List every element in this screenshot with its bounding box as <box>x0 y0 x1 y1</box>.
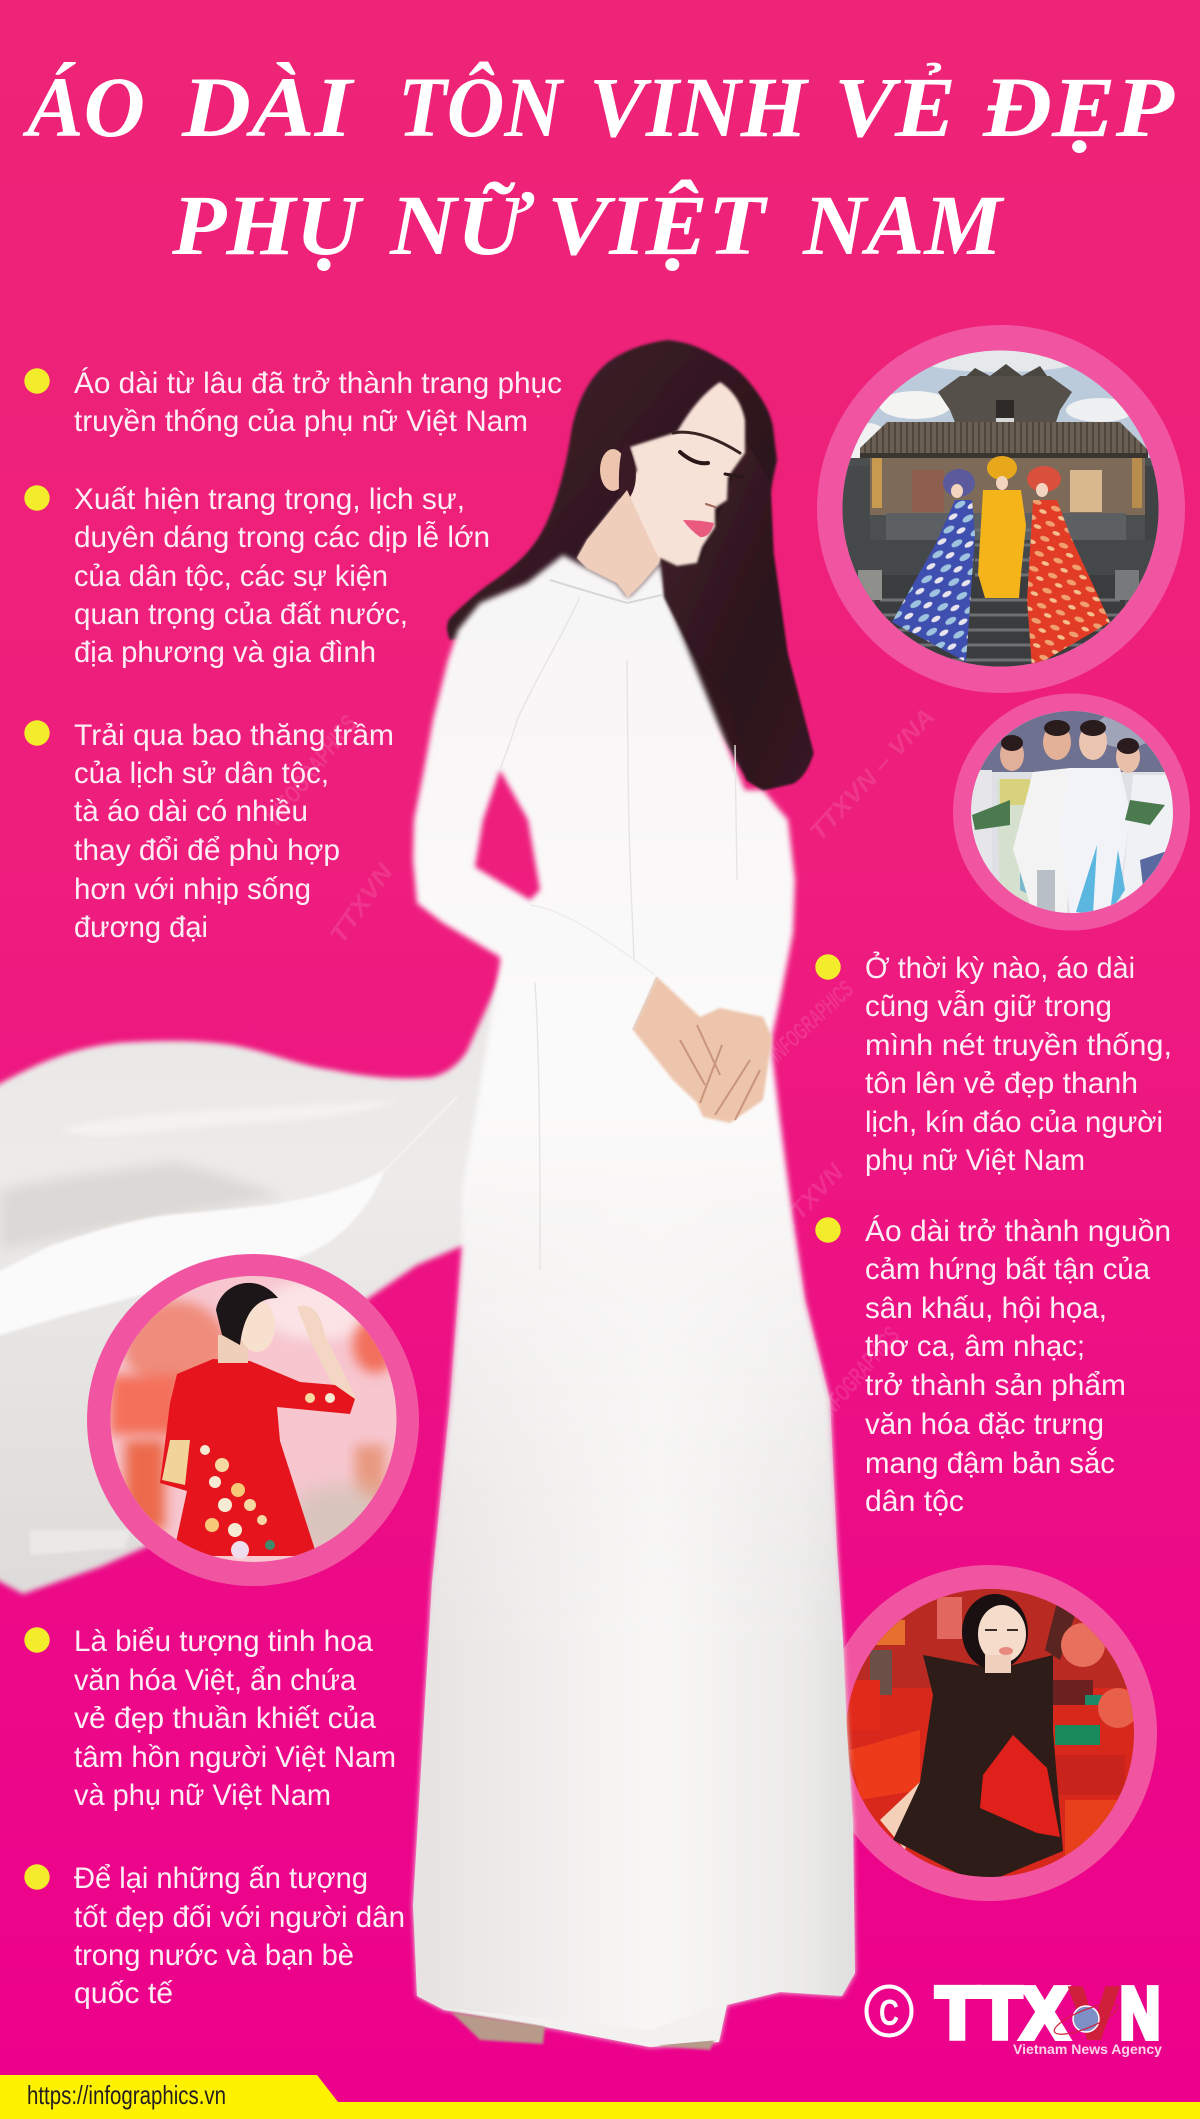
text block: intro: truyền thống của phụ nữ Việt Nam <box>74 405 528 438</box>
footer: yellow url tab: https://infographics.vn <box>27 2080 226 2110</box>
text block: tradition: Ở thời kỳ nào, áo dài <box>865 951 1135 985</box>
neck shadow <box>577 490 660 597</box>
text block: symbol: vẻ đẹp thuần khiết của <box>74 1702 376 1735</box>
text block: tradition: mình nét truyền thống, <box>865 1029 1172 1062</box>
text block: symbol: và phụ nữ Việt Nam <box>74 1779 331 1812</box>
hair back <box>447 340 813 790</box>
text block: history: của lịch sử dân tộc, <box>74 757 329 790</box>
text block: symbol: tâm hồn người Việt Nam <box>74 1741 396 1774</box>
title: TÔN <box>398 59 565 155</box>
text block: intro <box>74 367 562 438</box>
text block: inspiration: văn hóa đặc trưng <box>865 1408 1104 1441</box>
text block: tradition: phụ nữ Việt Nam <box>865 1144 1085 1177</box>
footer: yellow url tab <box>0 2075 1200 2119</box>
train of the dress <box>0 963 545 1594</box>
text block: history: thay đổi để phù hợp <box>74 834 340 867</box>
text block: intro: Áo dài từ lâu đã trở thành trang phục <box>74 367 562 400</box>
title: ÁO <box>22 59 145 155</box>
title: VẺ <box>834 59 956 155</box>
text block: occasions: của dân tộc, các sự kiện <box>74 560 388 593</box>
text block: tradition: tôn lên vẻ đẹp thanh <box>865 1067 1138 1100</box>
train folds <box>0 1097 457 1555</box>
logo: TTXVN: Vietnam News Agency <box>1013 2042 1163 2057</box>
text block: inspiration: Áo dài trở thành nguồn <box>865 1215 1171 1248</box>
text block: inspiration: mang đậm bản sắc <box>865 1447 1115 1480</box>
photo circle: three women at the palace <box>817 325 1185 693</box>
text block: impressions: tốt đẹp đối với người dân <box>74 1901 405 1934</box>
text block: occasions: địa phương và gia đình <box>74 636 376 669</box>
text block: occasions: duyên dáng trong các dịp lễ lớn <box>74 521 490 554</box>
skirt shading <box>413 1200 855 2047</box>
text block: history: đương đại <box>74 911 208 944</box>
text block: symbol: văn hóa Việt, ẩn chứa <box>74 1664 356 1697</box>
text block: impressions: trong nước và bạn bè <box>74 1939 354 1972</box>
text block: inspiration: trở thành sản phẩm <box>865 1369 1126 1402</box>
dress seams <box>500 580 737 1270</box>
ear <box>600 449 626 491</box>
title: NAM <box>802 177 1005 273</box>
hands <box>633 977 772 1123</box>
eyes, brows and lips <box>673 432 743 537</box>
text block: history: tà áo dài có nhiều <box>74 795 308 828</box>
watermarks: TTXVN – VNA <box>805 703 940 846</box>
hair front <box>662 440 813 790</box>
title: DÀI <box>181 59 355 155</box>
text block: impressions: Để lại những ấn tượng <box>74 1862 368 1895</box>
text block: history: Trải qua bao thăng trầm <box>74 719 394 752</box>
text block: occasions: Xuất hiện trang trọng, lịch sự, <box>74 483 465 516</box>
text block: history: hơn với nhịp sống <box>74 873 311 906</box>
bullets <box>24 368 841 1890</box>
watermarks: TTXVN <box>325 859 399 948</box>
watermarks: INFOGRAPHICS <box>261 711 363 830</box>
text block: symbol: Là biểu tượng tinh hoa <box>74 1625 373 1658</box>
text block: tradition: lịch, kín đáo của người <box>865 1106 1163 1139</box>
photo circle: painting of woman in black <box>821 1565 1157 1901</box>
photo: woman in white ao dai <box>0 340 870 2060</box>
text block: symbol <box>74 1625 396 1812</box>
title: VINH <box>589 59 810 155</box>
text block: inspiration <box>865 1215 1171 1518</box>
title: VIỆT <box>547 177 769 273</box>
text block: inspiration: dân tộc <box>865 1485 964 1518</box>
text block: tradition <box>865 951 1172 1177</box>
text block: occasions: quan trọng của đất nước, <box>74 598 408 631</box>
watermarks: INFOGRAPHICS <box>814 1322 905 1424</box>
text block: occasions <box>74 483 490 669</box>
shoes <box>444 2003 727 2050</box>
watermarks <box>261 703 940 1424</box>
text block: impressions <box>74 1862 405 2010</box>
title: PHỤ <box>171 177 364 273</box>
text block: inspiration: thơ ca, âm nhạc; <box>865 1330 1085 1363</box>
hair strand by the cheek <box>619 440 636 510</box>
dress silhouette <box>413 555 855 2047</box>
logo: TTXVN: TTX <box>936 1974 1068 2054</box>
text block: history <box>74 719 394 944</box>
logo: TTXVN: N <box>1120 1974 1160 2054</box>
title: ĐẸP <box>982 59 1176 155</box>
title: NỮ <box>389 177 535 273</box>
logo: copyright mark <box>866 1986 912 2036</box>
text block: inspiration: sân khấu, hội họa, <box>865 1292 1107 1325</box>
logo: TTXVN <box>936 1974 1163 2057</box>
watermarks: TTXVN <box>775 1159 849 1236</box>
text block: inspiration: cảm hứng bất tận của <box>865 1253 1150 1286</box>
logo: TTXVN: V <box>1070 1974 1118 2054</box>
photo circle: woman in red ao dai <box>87 1254 419 1586</box>
title <box>22 59 1176 273</box>
face <box>577 382 745 597</box>
watermarks: INFOGRAPHICS <box>764 976 859 1067</box>
photo circle: models on stage <box>953 694 1190 930</box>
text block: tradition: cũng vẫn giữ trong <box>865 990 1112 1023</box>
logo: copyright mark: C <box>879 1992 899 2033</box>
text block: impressions: quốc tế <box>74 1977 173 2010</box>
